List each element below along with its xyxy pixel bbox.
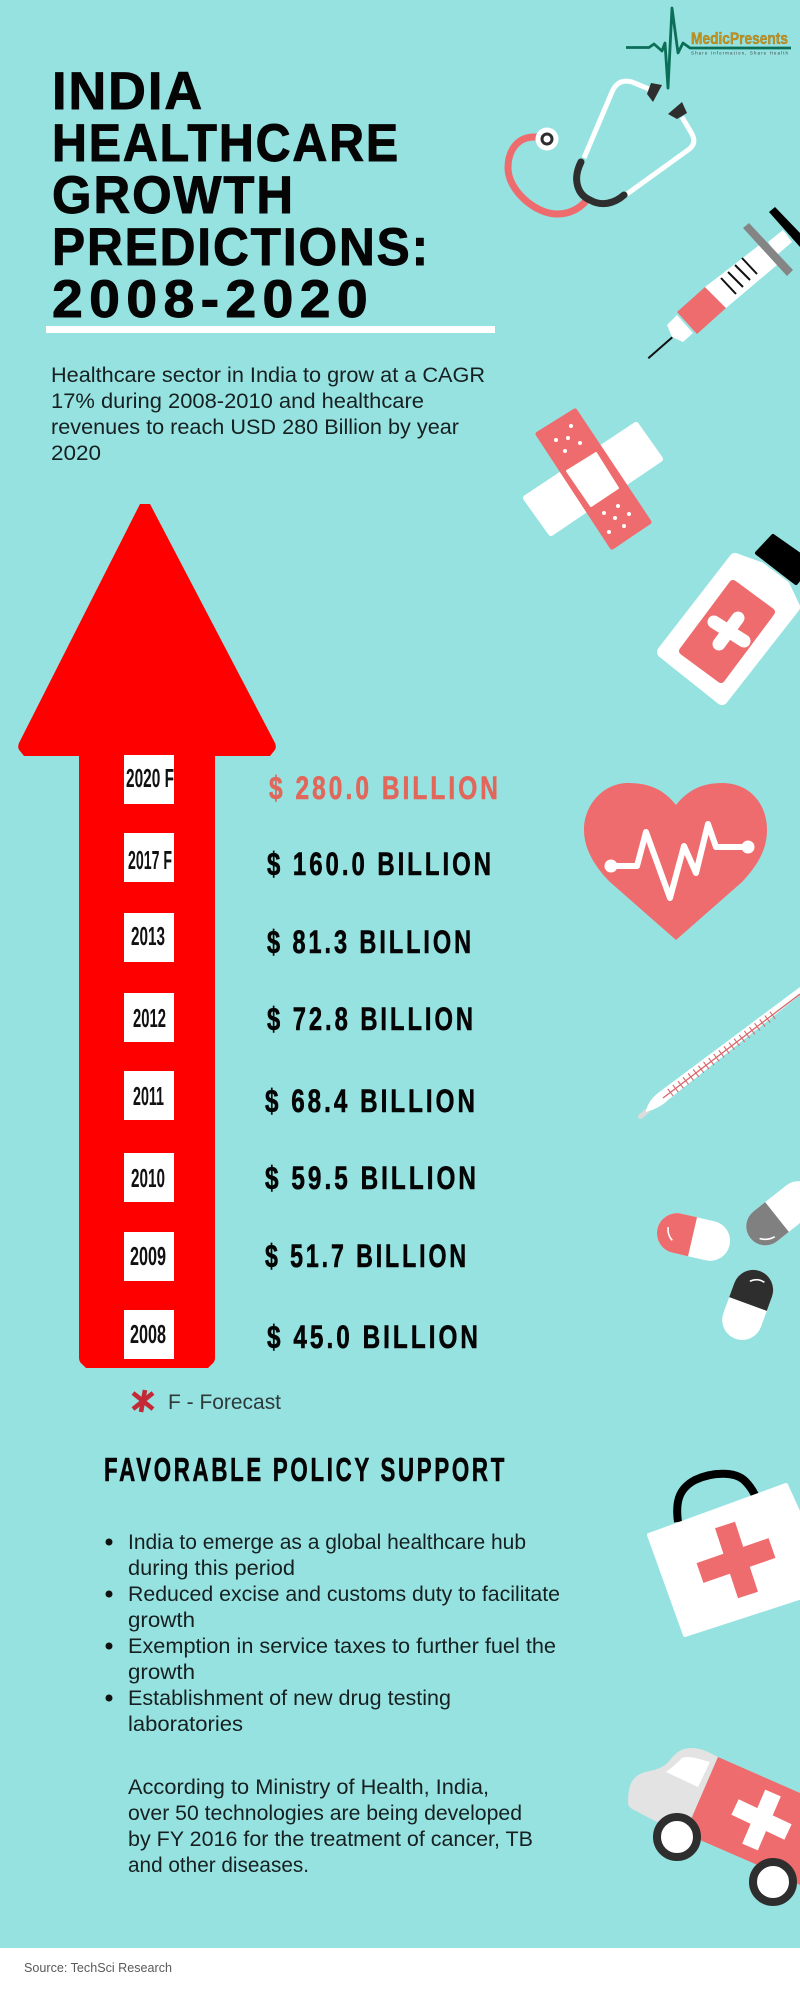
bullet list: growth xyxy=(128,1608,195,1632)
title: HEALTHCARE xyxy=(52,114,400,173)
year: 2017 F xyxy=(124,833,174,882)
title: GROWTH xyxy=(52,166,295,225)
year: 2010 xyxy=(124,1153,174,1202)
paragraph: ministry of health: over 50 technologies are being developed xyxy=(128,1801,522,1825)
paragraph: ministry of health: According to Ministry of Health, India, xyxy=(128,1775,489,1799)
bullet list: Exemption in service taxes to further fuel the xyxy=(128,1634,556,1658)
icon: asterisk xyxy=(133,1390,153,1412)
footer band xyxy=(0,1948,800,2000)
year: 2008 xyxy=(124,1310,174,1359)
intro text: revenues to reach USD 280 Billion by year xyxy=(51,415,459,439)
intro text xyxy=(51,363,485,465)
values list: $ 280.0 BILLION xyxy=(269,770,501,806)
paragraph: ministry of health: by FY 2016 for the treatment of cancer, TB xyxy=(128,1827,533,1851)
bullet list: India to emerge as a global healthcare hub xyxy=(128,1530,526,1554)
year: 2012 xyxy=(124,993,174,1042)
values list: $ 160.0 BILLION xyxy=(267,846,494,882)
year: 2008: 2008 xyxy=(130,1319,166,1349)
bullet list: during this period xyxy=(128,1556,295,1580)
icon: first aid kit xyxy=(649,1474,800,1635)
forecast legend: F - Forecast xyxy=(168,1391,281,1414)
title: 2008-2020 xyxy=(52,270,374,329)
values list: $ 81.3 BILLION xyxy=(267,924,474,960)
year: 2017 F: 2017 F xyxy=(128,845,172,875)
title xyxy=(52,62,430,329)
intro text: 2020 xyxy=(51,441,101,465)
source text: Source: TechSci Research xyxy=(24,1960,172,1975)
year: 2009: 2009 xyxy=(130,1241,166,1271)
intro text: 17% during 2008-2010 and healthcare xyxy=(51,389,424,413)
year: 2009 xyxy=(124,1232,174,1281)
paragraph: ministry of health: and other diseases. xyxy=(128,1853,309,1877)
values list: $ 59.5 BILLION xyxy=(265,1160,479,1196)
bullet list: Reduced excise and customs duty to facilitate xyxy=(128,1582,560,1606)
intro text: Healthcare sector in India to grow at a CAGR xyxy=(51,363,485,387)
icon: pills xyxy=(653,1173,800,1346)
year: 2012: 2012 xyxy=(133,1003,166,1033)
icon: bandage xyxy=(526,411,660,547)
values list xyxy=(265,770,501,1355)
icon: ambulance xyxy=(628,1748,800,1902)
values list: $ 51.7 BILLION xyxy=(265,1238,469,1274)
year: 2013 xyxy=(124,913,174,962)
year: 2020 F: 2020 F xyxy=(126,763,174,793)
heading: favorable policy support: FAVORABLE POLICY SUPPORT xyxy=(104,1451,507,1488)
values list: $ 45.0 BILLION xyxy=(267,1319,481,1355)
bullet list: growth xyxy=(128,1660,195,1684)
values list: $ 72.8 BILLION xyxy=(267,1001,476,1037)
values list: $ 68.4 BILLION xyxy=(265,1083,478,1119)
year: 2013: 2013 xyxy=(131,921,165,951)
bullet list xyxy=(106,1530,560,1736)
title: INDIA xyxy=(52,62,204,121)
arrow with years xyxy=(18,504,276,1368)
year: 2011 xyxy=(124,1071,174,1120)
coral pill xyxy=(653,1209,734,1265)
bullet list: laboratories xyxy=(128,1712,243,1736)
title: PREDICTIONS: xyxy=(52,218,430,277)
logo: MedicPresents xyxy=(626,8,791,88)
icon: stethoscope xyxy=(508,81,694,214)
red up arrow xyxy=(18,504,276,1368)
icon: thermometer xyxy=(640,987,800,1116)
icon: syringe xyxy=(648,207,800,358)
icon: heart with pulse xyxy=(584,783,767,940)
bullet list: Establishment of new drug testing xyxy=(128,1686,451,1710)
year: 2011: 2011 xyxy=(133,1081,164,1111)
year: 2010: 2010 xyxy=(131,1163,165,1193)
logo: MedicPresents: Share Information, Share Health xyxy=(691,50,788,56)
grey pill xyxy=(739,1173,800,1253)
year: 2020 F xyxy=(124,755,174,804)
paragraph: ministry of health xyxy=(128,1775,533,1877)
icon: medicine bottle xyxy=(663,536,800,699)
black pill xyxy=(717,1264,779,1346)
